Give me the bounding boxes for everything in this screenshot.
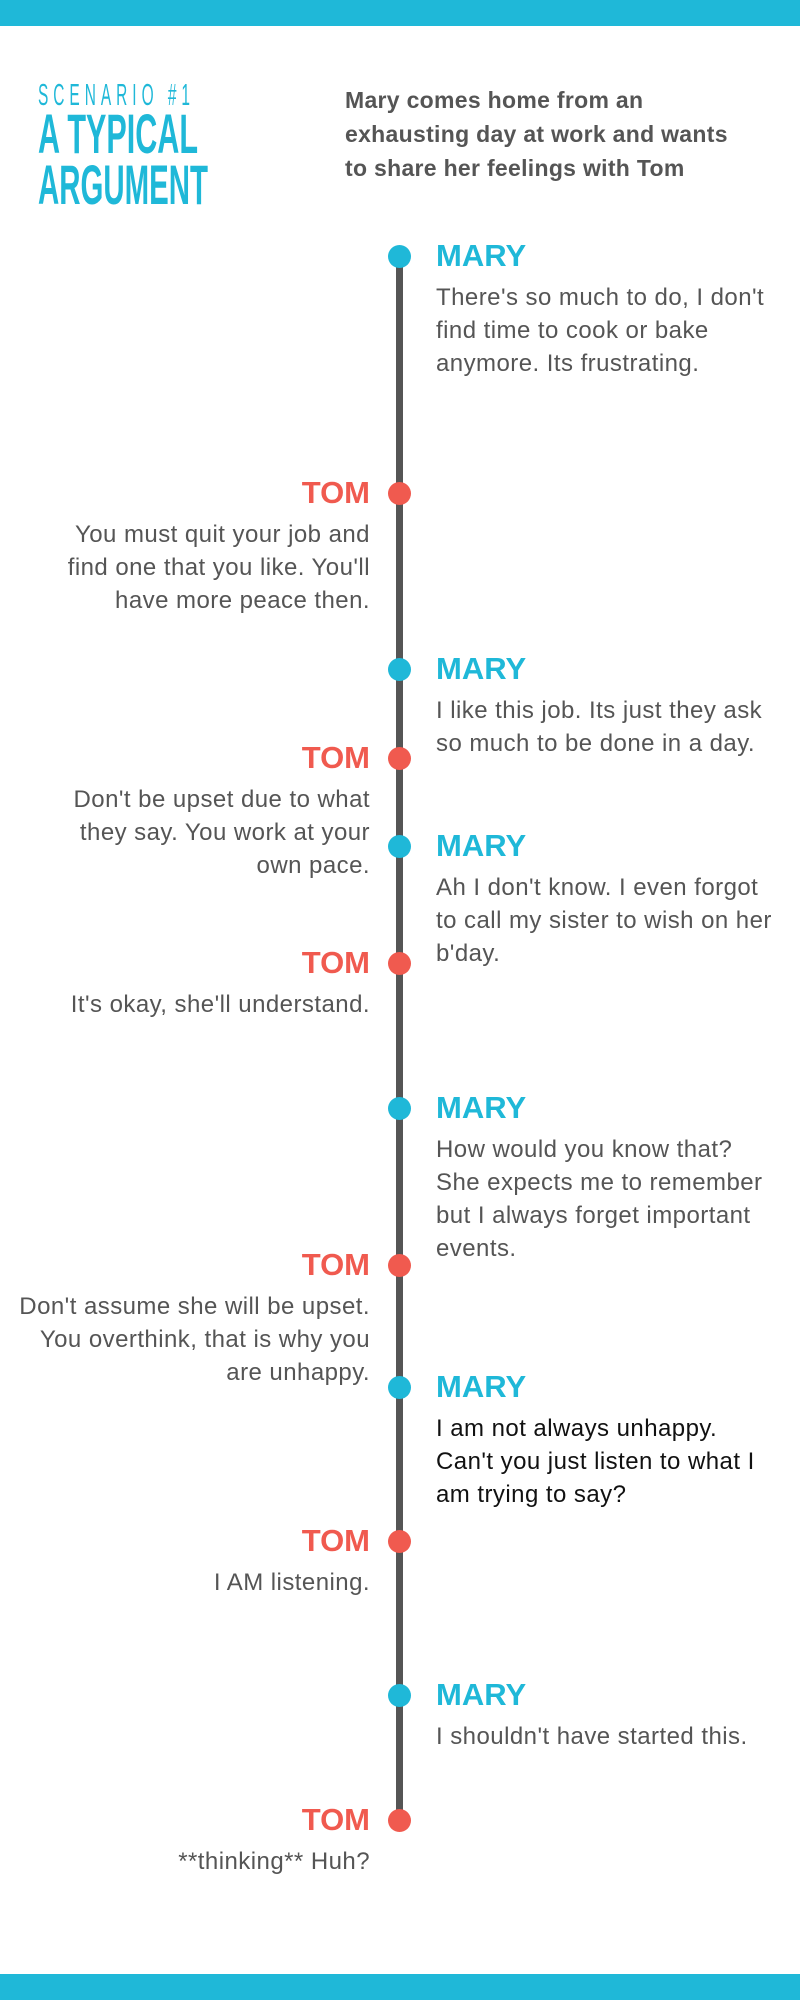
- text: MARY: [436, 238, 526, 273]
- text: to call my sister to wish on her: [436, 907, 772, 934]
- text: events.: [436, 1235, 517, 1262]
- text: She expects me to remember: [436, 1169, 763, 1196]
- entry 2 tom: [68, 475, 411, 614]
- entry 11 mary: [388, 1677, 748, 1750]
- text: Can't you just listen to what I: [436, 1448, 755, 1475]
- top bar: [0, 0, 800, 26]
- text: Don't assume she will be upset.: [19, 1293, 370, 1320]
- entry 6 tom: [71, 945, 411, 1018]
- text: Ah I don't know. I even forgot: [436, 874, 758, 901]
- text: How would you know that?: [436, 1136, 732, 1163]
- text: find one that you like. You'll: [68, 554, 370, 581]
- text: own pace.: [257, 852, 370, 879]
- text: MARY: [436, 1677, 526, 1712]
- text: You must quit your job and: [75, 521, 370, 548]
- subtitle: [345, 87, 728, 181]
- text: MARY: [436, 828, 526, 863]
- entry 10 tom: [214, 1523, 411, 1596]
- text: MARY: [436, 651, 526, 686]
- subtitle: to share her feelings with Tom: [345, 155, 685, 181]
- text: anymore. Its frustrating.: [436, 350, 699, 377]
- entry 7 mary: [388, 1090, 763, 1262]
- timeline line: [396, 256, 403, 1821]
- text: I like this job. Its just they ask: [436, 697, 762, 724]
- text: have more peace then.: [115, 587, 370, 614]
- title: [38, 77, 208, 216]
- text: so much to be done in a day.: [436, 730, 755, 757]
- text: TOM: [302, 1523, 370, 1558]
- text: **thinking** Huh?: [178, 1848, 370, 1875]
- text: You overthink, that is why you: [40, 1326, 370, 1353]
- text: MARY: [436, 1090, 526, 1125]
- entry 12 tom: [178, 1802, 411, 1875]
- text: MARY: [436, 1369, 526, 1404]
- text: find time to cook or bake: [436, 317, 709, 344]
- text: There's so much to do, I don't: [436, 284, 764, 311]
- text: TOM: [302, 475, 370, 510]
- bottom bar: [0, 1974, 800, 2000]
- text: TOM: [302, 1802, 370, 1837]
- entry 9 mary: [388, 1369, 755, 1508]
- entry 8 tom: [19, 1247, 411, 1386]
- text: but I always forget important: [436, 1202, 751, 1229]
- text: Don't be upset due to what: [74, 786, 370, 813]
- entry 1 mary: [388, 238, 764, 377]
- text: b'day.: [436, 940, 500, 967]
- text: I AM listening.: [214, 1569, 370, 1596]
- text: TOM: [302, 1247, 370, 1282]
- text: It's okay, she'll understand.: [71, 991, 370, 1018]
- text: I am not always unhappy.: [436, 1415, 717, 1442]
- entry 5 mary: [388, 828, 772, 967]
- subtitle: Mary comes home from an: [345, 87, 643, 113]
- text: TOM: [302, 945, 370, 980]
- entry 3 mary: [388, 651, 762, 757]
- text: TOM: [302, 740, 370, 775]
- text: am trying to say?: [436, 1481, 626, 1508]
- text: they say. You work at your: [80, 819, 370, 846]
- subtitle: exhausting day at work and wants: [345, 121, 728, 147]
- text: are unhappy.: [226, 1359, 370, 1386]
- text: I shouldn't have started this.: [436, 1723, 748, 1750]
- entry 4 tom: [74, 740, 411, 879]
